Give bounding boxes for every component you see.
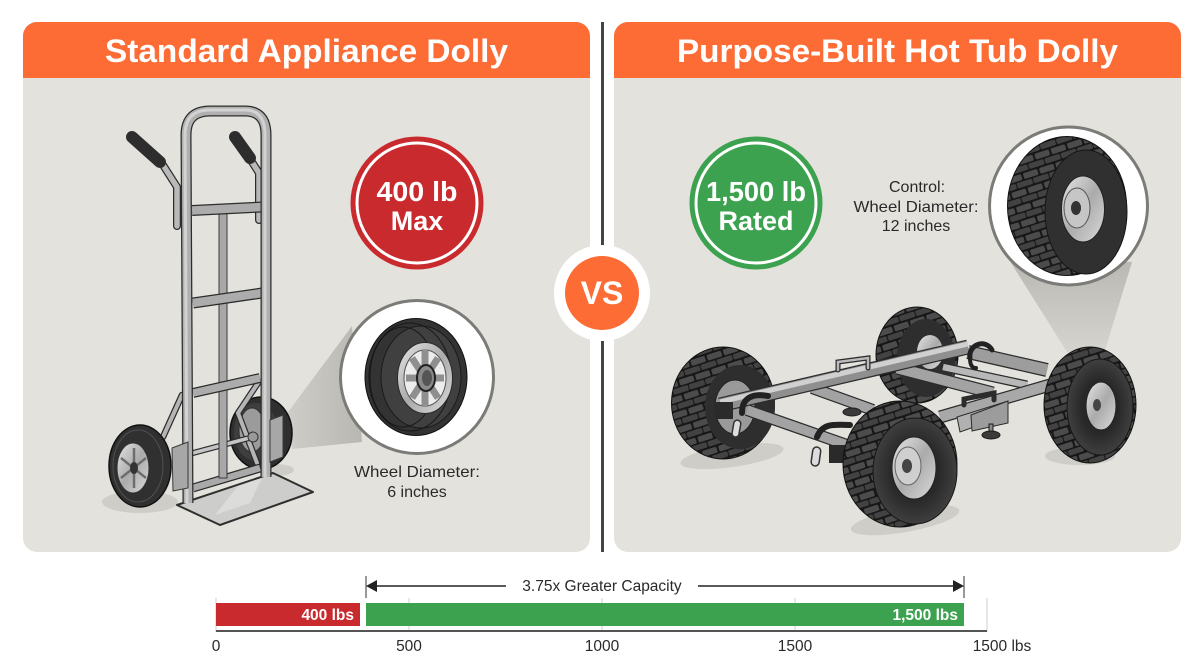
brackets [742,344,994,437]
wheel callout: 6 inches: Wheel Diameter: [354,464,480,481]
right wheel [1044,347,1136,463]
bar: 1,500 lbs [366,603,964,626]
magnifier cone: left [288,326,362,449]
jack feet [843,408,1000,439]
axis labels: 1500 lbs [973,638,1032,655]
panel: purpose-built hot tub dolly [614,22,1181,552]
axis labels: 500 [396,638,422,655]
wheel callout: 12 inches [990,127,1148,285]
axis labels: 1500 [778,638,813,655]
control label: 12 inches [882,218,950,235]
badge: 1,500 lb rated [690,136,822,270]
front wheel [843,401,957,527]
control label [854,179,978,235]
illustration: hot tub dolly [672,307,1136,541]
wheel callout: 6 inches: 6 inches [387,484,447,501]
bar: 400 lbs: 400 lbs [301,607,354,624]
axis line [216,630,987,632]
badge: 1,500 lb rated: Rated [718,206,794,236]
left header [23,22,590,78]
main frame [185,110,266,503]
vs badge: VS [581,275,623,311]
vs badge [554,245,650,341]
cross bars [192,207,262,393]
illustration: hand truck [102,110,313,525]
near wheel [109,425,171,507]
right header [614,22,1181,78]
divider [601,22,604,552]
control label: Wheel Diameter: [854,199,978,216]
handles [132,137,259,226]
mounting plate [957,401,1008,432]
capacity dimension arrow: 3.75x Greater Capacity [522,578,682,595]
left wheel [672,347,775,459]
back wheel [876,307,958,403]
axis labels [212,638,1032,655]
centre upright [219,213,227,478]
badge: 1,500 lb rated: 1,500 lb [706,176,806,207]
far wheel [230,397,292,469]
bar: 1,500 lbs: 1,500 lbs [892,607,958,624]
chart grid [216,598,987,632]
axis labels: 0 [212,638,221,655]
struts and axle [163,383,258,463]
axis labels: 1000 [585,638,620,655]
wheel callout: 6 inches [340,300,494,501]
bar: 400 lbs [216,603,360,626]
rail ends [715,402,733,419]
bar chart: capacity comparison [212,576,1032,655]
badge: 400 lb max: Max [391,206,443,236]
badge: 400 lb max [350,136,484,270]
magnifier cone: right [1008,258,1132,352]
capacity dimension arrow [366,576,964,598]
foot plate [177,473,313,525]
control label: Control: [889,179,945,196]
panel: standard appliance dolly [23,22,590,552]
badge: 400 lb max: 400 lb [376,176,458,207]
right header: Purpose-Built Hot Tub Dolly [677,33,1118,69]
shackles [731,420,821,466]
left header: Standard Appliance Dolly [105,33,508,69]
frame rails [720,344,1050,445]
side plates [172,442,188,491]
